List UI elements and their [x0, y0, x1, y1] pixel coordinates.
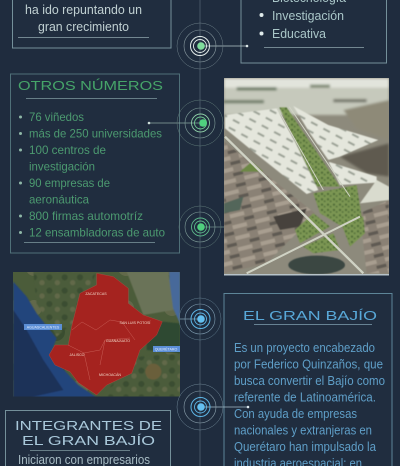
state labels: JALISCO [70, 353, 85, 357]
list: numeros: 76 viñedos [29, 110, 84, 124]
list: sectores: Educativa [272, 27, 326, 41]
list: numeros: 12 ensambladoras de auto [29, 226, 165, 240]
connector: node 5 to gran bajio [200, 406, 249, 408]
text: el gran bajio [234, 341, 385, 466]
label: Aguascalientes: AGUASCALIENTES [27, 326, 60, 330]
list: numeros: 100 centros de [29, 143, 106, 157]
panel: sectores [241, 0, 386, 63]
node: green 3 [179, 206, 221, 248]
text: el gran bajio: referente de Latinoamérica. [234, 390, 376, 404]
connector: node 2 to otros numeros [148, 122, 200, 124]
photo: aerial view of the industrial park [224, 78, 389, 274]
panel: crecimiento [12, 0, 171, 48]
label: Querétaro [153, 346, 180, 352]
list: numeros [19, 110, 165, 240]
text: el gran bajio: Con ayuda de empresas [234, 407, 357, 421]
text: el gran bajio: busca convertir el Bajío como [234, 374, 385, 388]
list: numeros: más de 250 universidades [29, 126, 162, 140]
node: green 2 [177, 100, 223, 146]
node: blue 4 [179, 298, 221, 340]
text: el gran bajio: Querétaro han impulsado la [234, 440, 376, 454]
state labels: MICHOACÁN [99, 373, 121, 377]
region: red states [49, 273, 162, 395]
list: sectores [260, 0, 346, 41]
heading: integrantes [15, 418, 162, 448]
list: numeros: 90 empresas de [29, 176, 110, 190]
label: Aguascalientes [24, 324, 62, 330]
connector: node 4 to map [180, 318, 200, 320]
text: crecimiento: ha ido repuntando un [25, 3, 142, 17]
list: sectores: Investigación [272, 9, 344, 23]
connector: node 3 to photo [200, 226, 224, 228]
state borders [68, 320, 135, 380]
label: Querétaro: QUERÉTARO [155, 346, 177, 352]
text: el gran bajio: nacionales y extranjeras en [234, 424, 372, 438]
state labels: SAN LUIS POTOSÍ [120, 321, 150, 325]
node: green and white 1 [177, 23, 223, 69]
list: numeros: investigación [29, 160, 95, 174]
list: numeros: aeronáutica [29, 192, 89, 206]
state labels: GUANAJUATO [106, 339, 130, 343]
heading: el gran bajio: EL GRAN BAJÍO [243, 308, 377, 323]
heading: integrantes: INTEGRANTES DE [15, 418, 162, 433]
node: blue 5 [177, 384, 223, 430]
text: crecimiento [25, 3, 142, 34]
list: numeros: 800 firmas automotríz [29, 209, 143, 223]
panel: el gran bajio [224, 294, 392, 466]
heading: otros numeros: OTROS NÚMEROS [18, 78, 163, 93]
state labels [70, 292, 150, 377]
connector: node 1 to sectores [200, 45, 248, 47]
state labels: ZACATECAS [85, 292, 107, 296]
heading: integrantes: EL GRAN BAJÍO [22, 433, 155, 448]
text: crecimiento: gran crecimiento [38, 20, 129, 34]
text: el gran bajio: Es un proyecto encabezado [234, 341, 375, 355]
map: El Gran Bajío region [13, 272, 180, 397]
text: el gran bajio: por Federico Quinzaños, que [234, 358, 383, 372]
panel: integrantes [6, 410, 170, 466]
